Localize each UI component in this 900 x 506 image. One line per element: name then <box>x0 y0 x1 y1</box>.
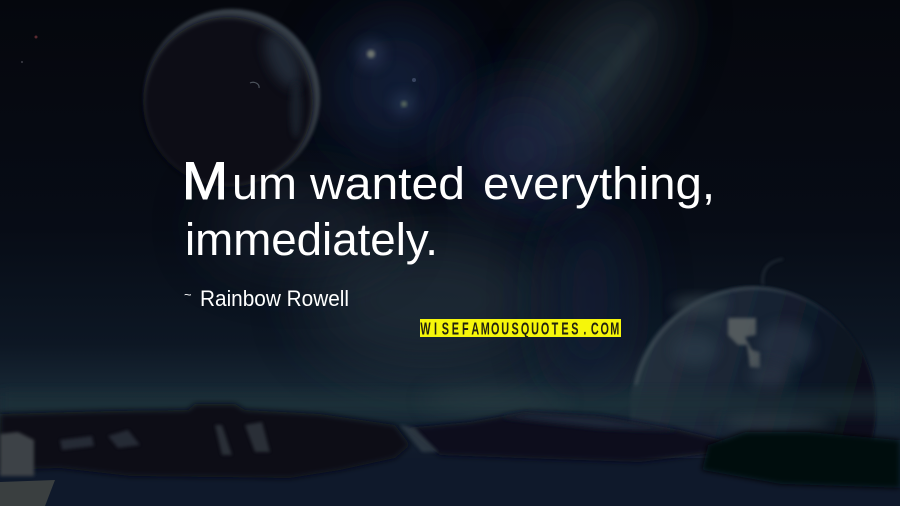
author attribution: ~ <box>184 287 192 302</box>
water <box>0 458 900 506</box>
planet: lower right <box>630 286 876 470</box>
quote text: immediately. <box>185 214 438 265</box>
quote text: M <box>182 152 228 211</box>
crescent moon <box>763 259 783 285</box>
quote text: um <box>232 158 297 209</box>
author attribution: Rainbow Rowell <box>200 286 349 311</box>
quote text: everything, <box>483 158 715 209</box>
quote text <box>182 152 715 265</box>
stars <box>21 36 416 116</box>
rocky islands <box>0 404 900 506</box>
horizon glow <box>0 388 900 430</box>
watermark badge: WISEFAMOUSQUOTES.COM <box>420 320 619 339</box>
planet: upper left <box>143 9 320 187</box>
quote text: wanted <box>309 158 465 209</box>
